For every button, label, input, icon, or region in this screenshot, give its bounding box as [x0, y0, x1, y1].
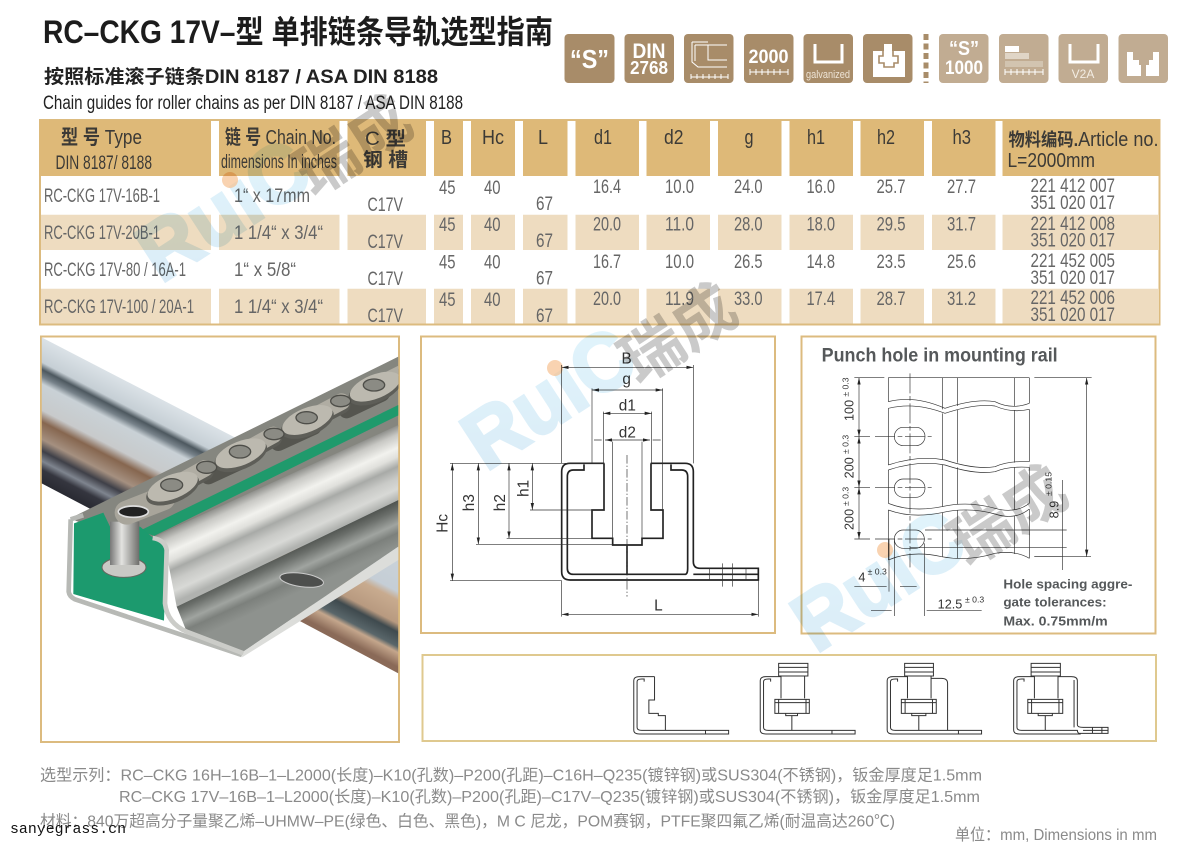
pitch dimensions: ± 0.3	[840, 377, 850, 397]
pitch dimensions: ± 0.3	[840, 435, 850, 454]
table row 4: RC-CKG 17V-100 / 20A-1	[44, 297, 194, 318]
hole spacing note: Max. 0.75mm/m	[1003, 614, 1108, 629]
panel: profile variants	[422, 655, 1156, 741]
table header labels: L=2000mm	[1008, 150, 1095, 172]
punch hole heading: Punch hole in mounting rail	[822, 346, 1058, 367]
icon: 2000	[744, 34, 794, 83]
table header labels: 型 号 Type	[61, 126, 142, 149]
table header labels: L	[538, 127, 548, 149]
title: RC–CKG 17V–型 单排链条导轨选型指南	[43, 14, 553, 50]
profile variant 3	[887, 663, 982, 734]
table row 3	[44, 251, 1115, 290]
icon: S 1000: “S”	[949, 38, 979, 60]
mounting hole in rail	[280, 572, 324, 588]
dimension d2: d2	[619, 425, 636, 442]
dimension h3: h3	[461, 494, 478, 511]
table row 3: 1“ x 5/8“	[234, 260, 296, 281]
table row 1: C17V	[368, 195, 403, 216]
rail lower flange	[242, 547, 398, 657]
dimension Hc: Hc	[435, 514, 452, 533]
table header labels: 物料编码.Article no.	[1008, 129, 1158, 151]
table header labels: h1	[807, 127, 825, 149]
dimension L	[562, 581, 758, 617]
feature icon row	[564, 34, 1168, 83]
table header labels: h3	[952, 127, 971, 149]
chain roller	[102, 522, 146, 577]
rail outer shiny wall	[153, 425, 398, 607]
table row 2	[44, 214, 1115, 253]
hole spacing note	[1003, 576, 1132, 629]
table row 2: 221 412 008	[1030, 214, 1115, 235]
table row 2: 67	[536, 231, 553, 252]
selection example line 1: 选型示列：RC–CKG 16H–16B–1–L2000(长度)–K10(孔数)–P200(孔距)–C16H–Q235(镀锌钢)或SUS304(不锈钢)，钣金厚度足1.5mm	[40, 766, 982, 784]
dimension 4: ± 0.3	[868, 567, 887, 577]
tinted rows	[41, 215, 1158, 324]
pitch dimensions: 200	[843, 457, 857, 478]
icon: 2000: 2000	[748, 47, 788, 68]
table row 2: 18.0	[806, 214, 835, 236]
table row 4: 351 020 017	[1030, 305, 1115, 326]
dimension g: g	[622, 371, 631, 388]
dimension L: L	[654, 597, 663, 614]
green guide front face	[73, 513, 167, 621]
table row 1: 24.0	[734, 177, 762, 198]
channel profile	[562, 463, 758, 580]
table row 4: 33.0	[734, 289, 762, 310]
icon: profile pair	[1118, 34, 1168, 83]
dimension h2: h2	[492, 494, 509, 511]
background mounting rail, far part	[42, 338, 264, 582]
table row 3: C17V	[368, 269, 403, 290]
table row 3: 16.7	[593, 252, 621, 273]
dimension 4	[854, 539, 917, 592]
table row 3: 26.5	[734, 252, 762, 273]
table row 3: 45	[439, 252, 456, 274]
dimension 12.5	[871, 539, 984, 616]
profile variant 4	[1014, 663, 1108, 734]
table row 3: 10.0	[665, 252, 694, 273]
dimension 12.5: 12.5	[938, 598, 962, 612]
table header labels: dimensions In inches	[221, 152, 337, 173]
table row 2: C17V	[368, 232, 403, 253]
dimension 8.9: 8.9	[1047, 501, 1061, 518]
table row 3: 23.5	[876, 252, 906, 273]
table header labels: 钢 槽	[363, 149, 408, 171]
rail end cut edge	[69, 515, 242, 655]
table header labels: B	[441, 127, 452, 149]
table row 4: 20.0	[593, 289, 621, 310]
rail inner floor	[177, 500, 398, 652]
table row 4: 1 1/4“ x 3/4“	[234, 297, 323, 318]
icon: galvanized: galvanized	[806, 69, 850, 81]
dimension d2	[594, 425, 661, 442]
icon: cut profile	[684, 34, 734, 83]
table row 1: 16.4	[593, 177, 621, 198]
table row 4: C17V	[368, 306, 403, 327]
icon: DIN 2768: DIN	[632, 40, 666, 63]
dimension 12.5: ± 0.3	[965, 595, 984, 605]
table row 1: 16.0	[806, 177, 835, 198]
selection example line 2: RC–CKG 17V–16B–1–L2000(长度)–K10(孔数)–P200(孔距)–C17V–Q235(镀锌钢)或SUS304(不锈钢)，钣金厚度足1.5mm	[119, 788, 980, 806]
subtitle: English: Chain guides for roller chains as per DIN 8187 / ASA DIN 8188	[43, 93, 463, 114]
table row 4: 221 452 006	[1030, 288, 1115, 309]
green wear strip along rail	[140, 405, 398, 536]
roller chain	[118, 366, 406, 517]
table row 3: 40	[484, 252, 500, 274]
background mounting rail, near part	[270, 510, 398, 674]
profile variant 1	[634, 677, 729, 734]
table header labels: d2	[664, 127, 684, 149]
table row 3: 67	[536, 268, 553, 290]
rail front lip edge	[153, 538, 243, 653]
table row 3: RC-CKG 17V-80 / 16A-1	[44, 260, 186, 281]
icon: S: “S”	[570, 44, 609, 74]
dimension 8.9	[910, 472, 1067, 570]
table row 3: 221 452 005	[1030, 251, 1115, 272]
table header labels: g	[744, 127, 754, 149]
slot centre lines	[875, 373, 932, 567]
table row 1: 40	[484, 178, 500, 199]
chain guide insert outline	[592, 463, 663, 574]
dimension 4: 4	[858, 570, 865, 584]
icon: DIN 2768	[624, 34, 674, 83]
dimension h2	[492, 463, 592, 538]
table row 1: 221 412 007	[1030, 176, 1115, 197]
table row 4: 45	[439, 290, 456, 311]
profile variant 2	[760, 663, 855, 734]
table row 2: 40	[484, 215, 500, 236]
table row 1: RC-CKG 17V-16B-1	[44, 186, 160, 207]
table row 2: 20.0	[593, 214, 621, 236]
oblong slots	[894, 427, 925, 548]
table row 2: 45	[439, 215, 456, 236]
table row 1: 45	[439, 178, 456, 199]
icon: S	[564, 34, 614, 83]
roller outline and centre line	[613, 442, 746, 587]
table row 3: 351 020 017	[1030, 268, 1115, 289]
table header labels: h2	[877, 127, 895, 149]
icon: DIN 2768: 2768	[630, 58, 668, 78]
table row 1: 351 020 017	[1030, 193, 1115, 214]
table header labels: d1	[594, 127, 612, 149]
table row 4: 40	[484, 290, 500, 311]
dimension g	[592, 371, 663, 510]
dotted separator	[924, 34, 928, 83]
pitch dimensions: 100	[843, 400, 857, 421]
specification table	[40, 120, 1160, 327]
icon: V2A	[1058, 34, 1108, 83]
watermarks	[121, 84, 1080, 669]
table row 4: 67	[536, 306, 553, 327]
table row 1: 1“ x 17mm	[234, 186, 310, 207]
table row 2: 29.5	[876, 214, 906, 236]
table row 2: 31.7	[947, 214, 976, 236]
table header labels: C 型	[365, 128, 406, 150]
overall height dimension	[1034, 378, 1092, 557]
panel: dimension drawing	[421, 336, 775, 633]
pitch dimensions: 200	[843, 509, 857, 530]
dimension h1	[450, 463, 604, 510]
icon: V2A: V2A	[1072, 67, 1094, 81]
table header labels: DIN 8187/ 8188	[56, 153, 152, 174]
panel: punch hole drawing	[802, 336, 1156, 634]
table row 2: 1 1/4“ x 3/4“	[234, 223, 323, 244]
table row 1: 67	[536, 194, 553, 215]
table header labels: 链 号 Chain No.	[225, 126, 336, 149]
table row 4: 28.7	[876, 289, 906, 310]
source mark: sanyegrass.cn	[10, 821, 126, 838]
hole spacing note: gate tolerances:	[1003, 595, 1107, 610]
table row 2: RC-CKG 17V-20B-1	[44, 223, 160, 244]
icon: guide block	[863, 34, 912, 83]
icon: galvanized	[804, 34, 853, 83]
table header labels: Hc	[482, 127, 504, 149]
chain guide rail back wall	[70, 357, 398, 540]
table row 2: 11.0	[665, 214, 694, 236]
material note: 材料：840万超高分子量聚乙烯–UHMW–PE(绿色、白色、黑色)，M C 尼龙，POM赛钢，PTFE聚四氟乙烯(耐温高达260℃)	[40, 812, 895, 830]
table row 4: 11.9	[665, 289, 694, 310]
pitch dimensions: ± 0.3	[840, 487, 850, 506]
dimension B: B	[622, 350, 632, 367]
table row 4	[44, 288, 1115, 327]
icon: S 1000	[939, 34, 988, 83]
table row 4: 17.4	[806, 289, 835, 310]
table header labels	[56, 126, 1158, 174]
table row 1: 25.7	[876, 177, 906, 198]
icon: S 1000: 1000	[945, 58, 983, 79]
units note: 单位：mm, Dimensions in mm	[955, 826, 1157, 844]
table row 1: 10.0	[665, 177, 694, 198]
table row 1	[44, 176, 1115, 216]
table row 1: 27.7	[947, 177, 976, 198]
table row 2: 28.0	[734, 214, 762, 236]
dimension Hc	[435, 463, 562, 581]
table row 4: 31.2	[947, 289, 976, 310]
dimension d1: d1	[619, 397, 636, 414]
rail outline with break lines	[888, 378, 1029, 560]
dimension B	[562, 350, 693, 463]
table row 3: 14.8	[806, 252, 835, 273]
hole spacing note: Hole spacing aggre-	[1003, 576, 1132, 591]
subtitle: Chinese: 按照标准滚子链条DIN 8187 / ASA DIN 8188	[44, 65, 438, 88]
table row 3: 25.6	[947, 252, 976, 273]
table row 2: 351 020 017	[1030, 230, 1115, 252]
dimension h1: h1	[516, 480, 533, 497]
dimension 8.9: ± 0.15	[1044, 472, 1054, 496]
pitch dimensions	[840, 377, 884, 539]
icon: layered bars	[999, 34, 1048, 83]
dimension d1	[603, 397, 652, 463]
table header cells	[40, 120, 1160, 176]
panel: product photo	[41, 336, 406, 742]
